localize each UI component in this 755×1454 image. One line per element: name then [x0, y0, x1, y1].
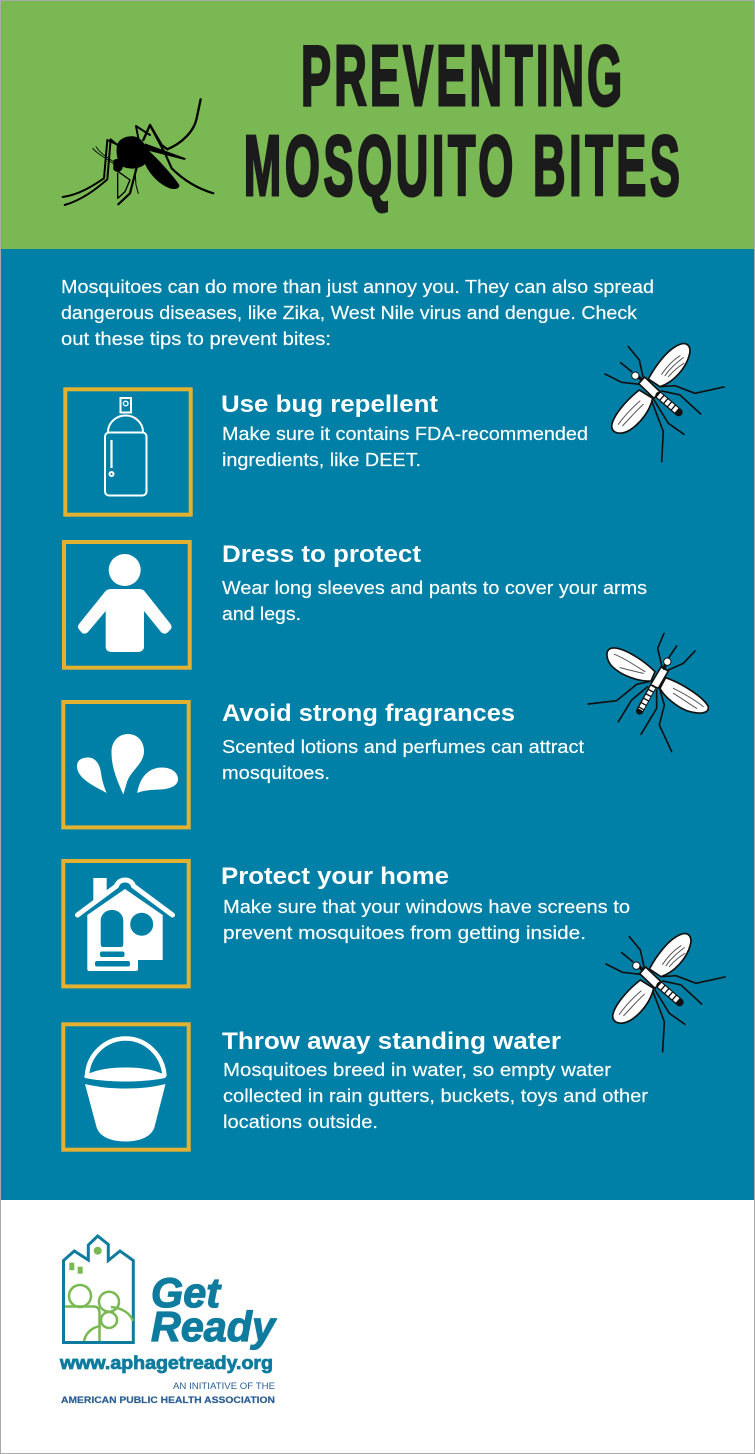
description: [222, 423, 588, 470]
description: and legs.: [222, 603, 301, 624]
icon: spray can: [65, 389, 191, 515]
intro text: dangerous diseases, like Zika, West Nile virus and dengue. Check: [61, 302, 638, 323]
icon: house: [63, 861, 189, 986]
tip 4: protect your home: [63, 861, 630, 986]
initiative line: AN INITIATIVE OF THE: [173, 1381, 275, 1392]
tip 3: avoid strong fragrances: [63, 700, 584, 827]
footer logo: Get Ready: [59, 1236, 278, 1406]
logo wordmark: Get: [151, 1269, 222, 1316]
heading: Throw away standing water: [222, 1028, 561, 1055]
description: [222, 577, 647, 624]
association name: AMERICAN PUBLIC HEALTH ASSOCIATION: [61, 1395, 275, 1406]
description: locations outside.: [223, 1111, 378, 1132]
logo wordmark: [151, 1269, 278, 1350]
description: Mosquitoes breed in water, so empty water: [223, 1059, 611, 1080]
tip 5: throw away standing water: [63, 1024, 648, 1150]
description: Scented lotions and perfumes can attract: [222, 736, 584, 757]
header panel: [1, 1, 754, 249]
heading: Use bug repellent: [221, 391, 438, 418]
icon: bucket: [63, 1024, 189, 1150]
icon: black mosquito silhouette: [63, 99, 213, 205]
heading: Protect your home: [221, 863, 449, 890]
icon: white mosquito bottom: [606, 934, 725, 1052]
intro text: out these tips to prevent bites:: [61, 328, 331, 349]
icon: fragrance drops: [63, 702, 189, 827]
tip 1: use bug repellent: [65, 389, 588, 515]
title: [244, 29, 680, 214]
icon: white mosquito top: [605, 344, 724, 462]
intro text: Mosquitoes can do more than just annoy you. They can also spread: [61, 276, 654, 297]
description: [223, 896, 630, 943]
description: ingredients, like DEET.: [222, 449, 421, 470]
description: prevent mosquitoes from getting inside.: [223, 922, 586, 943]
description: Make sure that your windows have screens to: [223, 896, 630, 917]
description: Make sure it contains FDA-recommended: [222, 423, 588, 444]
icon: white mosquito middle: [588, 633, 708, 752]
icon: house logo: [64, 1236, 133, 1342]
heading: Avoid strong fragrances: [222, 700, 515, 727]
description: Wear long sleeves and pants to cover your arms: [222, 577, 647, 598]
website url: www.aphagetready.org: [59, 1353, 273, 1373]
description: mosquitoes.: [222, 762, 330, 783]
description: [223, 1059, 648, 1132]
icon: person: [64, 542, 190, 668]
title: PREVENTING: [301, 29, 622, 124]
description: collected in rain gutters, buckets, toys and other: [223, 1085, 648, 1106]
tip 2: dress to protect: [64, 541, 647, 668]
title: MOSQUITO BITES: [244, 119, 680, 214]
intro text: [61, 276, 654, 349]
logo wordmark: Ready: [151, 1303, 278, 1350]
main blue panel: [1, 249, 754, 1200]
heading: Dress to protect: [222, 541, 421, 568]
description: [222, 736, 584, 783]
